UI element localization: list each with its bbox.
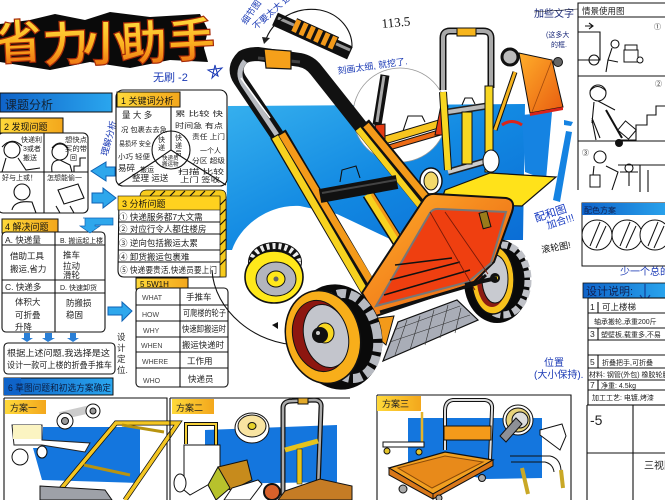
panel: 方案三 (377, 395, 571, 500)
panel 4: 解决问题: 滑轮 (63, 270, 81, 280)
heading: 课题分析 (0, 93, 112, 112)
panel 3: 分析问题: ① 快递服务都7大文需 (119, 212, 203, 222)
panel: 设计说明: 净重: 4.5kg (601, 381, 636, 390)
panel: 方案二: 方案二 (176, 402, 203, 413)
panel 2: 发现问题: 想快点 (65, 135, 87, 144)
top right notes (534, 7, 578, 49)
panel 2: 发现问题: 回 (70, 154, 77, 162)
panel 4: 解决问题: 稳固 (66, 310, 83, 320)
table: 5W1H: WHERE (142, 359, 168, 366)
scene 2: climbing stairs (590, 85, 665, 147)
note: 滚轮图: 滚轮图! (540, 239, 571, 255)
panel 2: 发现问题: 快递利 (21, 135, 42, 144)
heading 6: 草图问题和初选方案确定: 6 草图问题和初选方案确定 (8, 382, 111, 393)
panel 3: 分析问题 (118, 190, 226, 277)
table: 5W1H: 快速卸搬运时 (182, 324, 226, 334)
panel 4: 解决问题: C. 快递多 (5, 282, 42, 292)
panel 4: 解决问题: 防搬损 (66, 298, 92, 308)
panel: 情景使用图: 情景使用图 (582, 6, 625, 16)
panel 4: 解决问题: A. 快递量 (5, 235, 41, 245)
bottom grid panel: 三视图 (587, 405, 665, 500)
note: 设计定位: 位. (117, 365, 128, 375)
panel: 设计说明: 加工工艺: 电镀,烤漆 (592, 393, 654, 402)
icon: star (208, 65, 222, 78)
panel: 配色方案: 配色方案 (584, 205, 616, 215)
panel 2: 发现问题: 2 发现问题 (4, 121, 48, 132)
note: 配和图: 配和图 (533, 202, 568, 225)
table: 5W1H: 工作用 (187, 356, 213, 366)
conclusion text box: 根据上述问题,我选择是这 (7, 348, 111, 358)
panel: 情景使用图 (578, 3, 665, 192)
panel: 设计说明: 5 (590, 357, 595, 367)
panel 1: 关键词分析: 1 关键词分析 (121, 95, 174, 106)
panel 1: 关键词分析: 分区 超级 (192, 156, 225, 165)
note: 设计定位: 计 (117, 343, 126, 353)
panel: 方案一 (4, 398, 178, 500)
table: 5W1H: 快递员 (188, 374, 214, 384)
panel 3: 分析问题: ④ 卸货搬运包裹难 (119, 252, 190, 262)
panel: 设计说明: 设计说明: (586, 284, 633, 298)
panel 4: 解决问题: 搬运,省力 (10, 264, 46, 274)
scene 1: truck and cart (578, 23, 643, 72)
panel: 设计说明: 折叠把手,可折叠 (602, 358, 653, 367)
arrow: to 5W1H (108, 302, 132, 321)
panel: 设计说明: 塑壁板,载重多,不易 (601, 330, 661, 339)
panel 2: 发现问题: 买的带 (65, 144, 87, 153)
panel 4: 解决问题: 拉动 (63, 261, 81, 271)
red triangular body with orange frame (362, 194, 513, 316)
panel 1: 关键词分析: 扫描 比较 (178, 167, 224, 176)
panel 4: 解决问题: 可折叠 (15, 310, 41, 320)
panel 1: 关键词分析: 况 包裹去去急 (121, 125, 167, 134)
panel 2: 发现问题: 3或者 (23, 144, 41, 153)
handle grip sleeve (264, 49, 291, 69)
table: 5W1H: 搬运快递时 (182, 340, 224, 350)
top right notes: 加些文字 (534, 7, 574, 20)
panel: 情景使用图: ③ (582, 149, 589, 157)
conclusion text box: 设计一款可上楼的折叠手推车 (7, 360, 112, 370)
panel 3: 分析问题: ③ 逆向包括搬运太累 (119, 238, 198, 248)
detail: handle grip with orange rings (262, 9, 352, 53)
table: 5W1H: 5 5W1H (140, 280, 169, 289)
panel 4: 解决问题: 4 解决问题 (5, 221, 49, 232)
panel: 设计说明: 1 (590, 302, 595, 312)
table: 5W1H (136, 278, 228, 387)
panel 2: 发现问题: 好与上或！ (2, 173, 37, 182)
heading: 课题分析: 课题分析 (5, 98, 53, 112)
panel 1: 关键词分析: 量 大 多 (122, 110, 153, 120)
panel 3: 分析问题: ② 对应行令人都住楼房 (119, 224, 206, 234)
scene 3: delivery (590, 151, 665, 192)
panel 4: 解决问题: B. 搬运起上楼 (60, 236, 103, 245)
title: 省力小助手: 力 (41, 17, 91, 72)
note: 配和图 (533, 202, 576, 232)
colour swatches (582, 220, 665, 250)
heading 6: 草图问题和初选方案确定 (4, 378, 113, 395)
panel: 情景使用图: ② (655, 80, 662, 88)
panel: 设计说明: 轴承搬轮,承重200斤 (594, 317, 657, 326)
luggage rear handle frame (420, 28, 499, 194)
note: 设计定位 (117, 332, 128, 375)
table: 5W1H: WHY (143, 328, 160, 335)
arrow: panel 3 to panel 4 (80, 218, 113, 233)
small wheel detail (212, 242, 303, 345)
arrow: from panel 1 to panel 2 (91, 162, 115, 181)
note: 位置: 位置 (544, 356, 564, 369)
panel 4: 解决问题: 推车 (63, 250, 80, 260)
panel 1: 关键词分析: 一个人 (200, 147, 221, 155)
panel 1: 关键词分析: 快 (158, 135, 165, 144)
back rails (368, 194, 404, 245)
top right notes: (这多大 (546, 30, 569, 39)
table: 5W1H: 手推车 (186, 292, 212, 302)
panel 1: 关键词分析: 易碎 (118, 163, 136, 173)
panel 1: 关键词分析: 整理 运送 (132, 173, 169, 183)
title: 省力小助手: 手 (167, 13, 216, 68)
panel: 方案二 (170, 398, 352, 500)
panel: 配色方案 (582, 203, 665, 266)
top right notes: 的框. (551, 40, 567, 49)
panel 2: 发现问题: 搬送 (23, 153, 37, 162)
panel 1: 关键词分析: 时间急 有点 (175, 121, 223, 130)
note: 设计定位: 定 (117, 354, 126, 364)
panel 1: 关键词分析: 易损坏 安全 (119, 139, 151, 148)
dimension: 113.5: 113.5 (381, 14, 411, 31)
table: 5W1H: WHAT (142, 295, 163, 302)
panel 3: 分析问题: ⑤ 快递要贵活,快递员要上门 (120, 265, 217, 275)
note: 刻画太细: 刻画太细, 就挖了. (337, 55, 408, 76)
front main wheel (276, 276, 392, 398)
panel 2: 发现问题 (0, 118, 88, 213)
panel 2: 发现问题: 怎想能偷一 (47, 173, 82, 182)
panel: 情景使用图: ① (654, 23, 661, 31)
panel: 设计说明 (583, 283, 665, 405)
author note: 无刷 -2 (153, 71, 188, 84)
panel 4: 解决问题: 借助工具 (10, 251, 45, 261)
title: 省力小助手: 助 (119, 16, 169, 71)
panel 3: 分析问题: 3 分析问题 (122, 198, 166, 209)
note: 配和图: 加合!!! (545, 211, 576, 232)
note: 位置 (534, 356, 583, 381)
panel: 设计说明: 可上楼梯 (602, 302, 637, 312)
blue stripes at right of orange plate (522, 112, 573, 202)
bottom grid panel: 三视图: -5 (590, 412, 603, 428)
panel 1: 关键词分析: 递 (158, 143, 165, 152)
panel 4: 解决问题: 体积大 (15, 297, 41, 307)
main blue marker background (226, 104, 525, 250)
conclusion text box (4, 343, 115, 374)
panel 1: 关键词分析: 搬运物 (162, 160, 179, 168)
hatched grey load plate (378, 300, 478, 361)
panel 1: 关键词分析: 快递员 (162, 154, 179, 162)
table: 5W1H: WHO (143, 378, 161, 385)
black cross bar with grip (320, 166, 397, 196)
panel: 设计说明: 3 (590, 329, 595, 339)
table: 5W1H: WHEN (141, 343, 162, 350)
panel 1: 关键词分析: 上门 签收 (180, 175, 220, 184)
table: 5W1H: HOW (142, 312, 160, 319)
title: 省力小助手: 小 (82, 18, 129, 71)
panel 1: 关键词分析 (116, 90, 227, 186)
panel: 设计说明: 7 (590, 380, 595, 390)
panel: 方案三: 方案三 (382, 398, 409, 409)
orange folding back plate (495, 49, 563, 130)
panel: 方案一: 方案一 (10, 402, 37, 413)
panel 4: 解决问题: D. 快速卸货 (60, 283, 97, 292)
note: 理解分析: 理解分析 (98, 119, 118, 157)
inset circle: handle folding detail (353, 68, 448, 162)
panel 1: 关键词分析: 递 (175, 141, 182, 150)
panel 1: 关键词分析: 搬运 (140, 165, 154, 174)
main handle upper: black and grey tube (237, 54, 362, 135)
arrows: panel 4 to conclusion (21, 333, 79, 342)
rear wheel (464, 239, 530, 323)
table: 5W1H: 可爬楼的轮子 (183, 308, 226, 318)
panel 1: 关键词分析: 小巧 轻便 (118, 152, 150, 161)
panel 1: 关键词分析: 责任 上门 (192, 132, 225, 141)
right long rail yellow orange (358, 125, 438, 218)
title: 省力小助手 (0, 12, 216, 72)
yellow platform (440, 173, 556, 206)
panel 4: 解决问题 (2, 219, 105, 332)
panel 1: 关键词分析: 快 (175, 133, 182, 142)
panel 1: 关键词分析: 员 (175, 150, 182, 158)
arrow: panel 2 to panel 3 (92, 188, 116, 208)
left long rail yellow orange (275, 134, 377, 297)
panel 4: 解决问题: 升降 (15, 322, 33, 332)
note: 设计定位: 设 (117, 332, 126, 342)
panel 1: 关键词分析: 累 比较 快 (175, 109, 223, 118)
note: 位置: (大小保持). (534, 368, 583, 381)
